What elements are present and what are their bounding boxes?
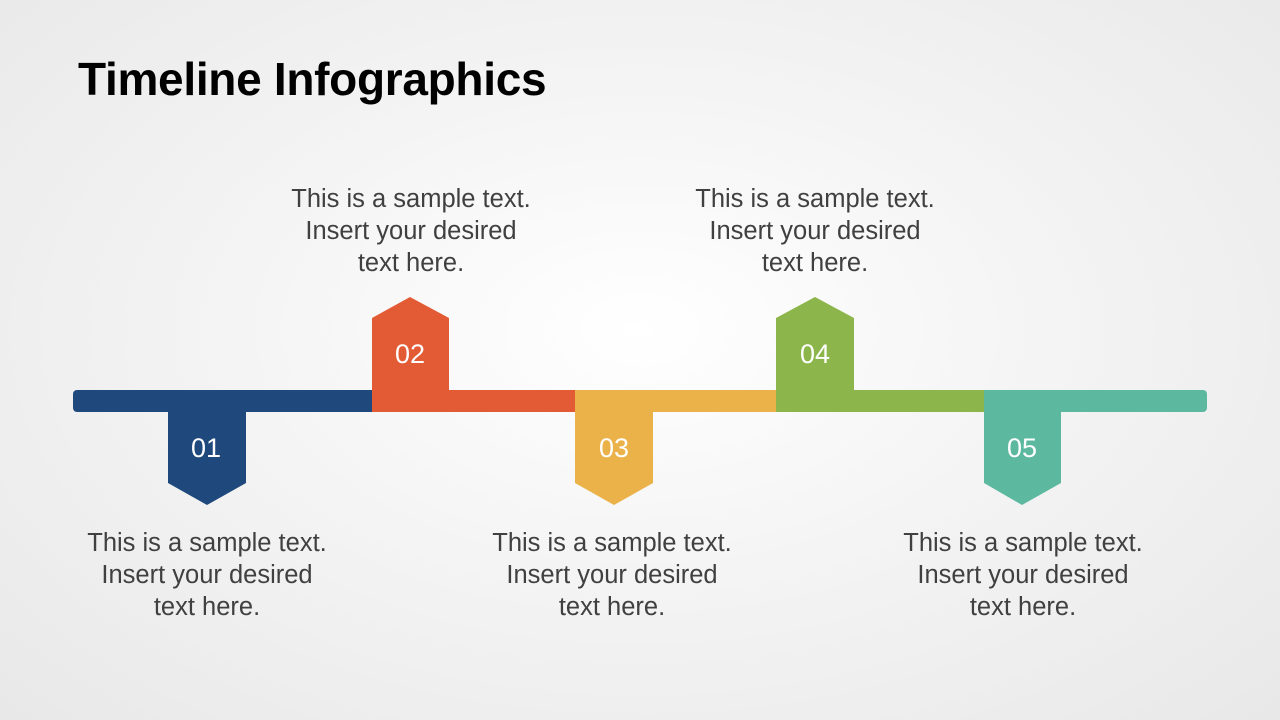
text 05: text here. [970,593,1076,621]
text 04 [695,185,935,277]
text 01 [87,529,327,621]
text 02: This is a sample text. [291,185,531,213]
step 01 [73,390,378,505]
text 01: This is a sample text. [87,529,327,557]
text 05: This is a sample text. [903,529,1143,557]
step 03 [575,390,776,505]
text 03: text here. [559,593,665,621]
text 03: This is a sample text. [492,529,732,557]
step 04 [776,297,984,412]
text 01: Insert your desired [101,561,313,589]
text 04: text here. [762,249,868,277]
text 02: Insert your desired [305,217,517,245]
text 02: text here. [358,249,464,277]
text 04: This is a sample text. [695,185,935,213]
text 05 [903,529,1143,621]
text 03 [492,529,732,621]
step 02 [372,297,575,412]
title: Timeline Infographics [78,53,546,105]
step 03: 03 [599,433,629,463]
text 05: Insert your desired [917,561,1129,589]
text 02 [291,185,531,277]
step 04: 04 [800,339,830,369]
step 01: 01 [191,433,221,463]
text 04: Insert your desired [709,217,921,245]
step 05 [984,390,1207,505]
text 01: text here. [154,593,260,621]
text 03: Insert your desired [506,561,718,589]
step 05: 05 [1007,433,1037,463]
step 02: 02 [395,339,425,369]
